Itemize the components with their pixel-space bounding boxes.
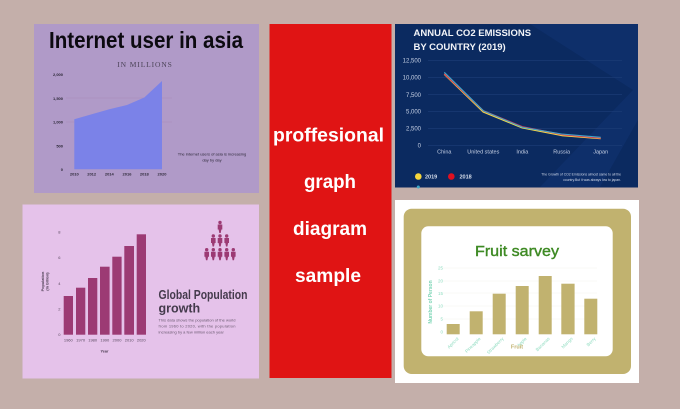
x axis labels (446, 336, 597, 355)
panel: red center title: sample (295, 265, 361, 287)
axis title: fruit: Fruit (511, 344, 523, 350)
bar chart (447, 276, 597, 334)
x axis labels: 2010 (125, 338, 134, 342)
x axis labels: China (437, 150, 452, 156)
y axis labels: 2,500 (406, 126, 422, 132)
y axis labels: 5,000 (406, 110, 422, 116)
y axis labels: 6 (58, 255, 61, 260)
heading: annual CO2 emissions: ANNUAL CO2 EMISSIONS (414, 28, 531, 39)
y axis labels: 4 (58, 281, 61, 286)
x axis labels: Russia (553, 150, 571, 156)
x axis labels: 1980 (88, 338, 98, 342)
y axis labels: 0 (61, 167, 64, 172)
y axis labels: 0 (58, 332, 61, 337)
line chart (444, 72, 601, 138)
description text: This data shows the population of the world (158, 318, 236, 322)
y axis labels: 10 (438, 304, 443, 308)
x axis labels: Berry (586, 336, 597, 347)
axis title: year: Year (100, 350, 109, 354)
panel: red center title: proffesional (273, 124, 384, 146)
y axis labels (438, 266, 443, 334)
panel: fruit survey (395, 200, 639, 383)
note text: country.But it was always low to japan. (563, 178, 621, 182)
x axis labels (64, 338, 147, 342)
legend (415, 173, 472, 188)
axis title: population: (in billion) (46, 272, 50, 291)
x axis labels: Apricot (446, 336, 460, 350)
panel: internet users in Asia (34, 24, 259, 193)
panel: global population growth (22, 204, 259, 378)
panel: red center title: diagram (293, 218, 367, 240)
x axis labels: Strawberry (486, 336, 505, 355)
y axis labels: 25 (438, 266, 443, 270)
x axis labels: 1970 (76, 338, 86, 342)
x axis labels: United states (467, 150, 500, 156)
heading: global population growth: Global Population (158, 288, 248, 302)
x axis labels: Japan (593, 150, 608, 156)
heading: annual CO2 emissions: BY COUNTRY (2019) (414, 42, 506, 53)
note text: The internet users of asia is increasing (178, 152, 246, 156)
subtitle: in millions: IN MILLIONS (117, 60, 173, 69)
note text: The Growth of CO2 Emissions almost same to all the (541, 172, 621, 176)
y axis labels: 500 (56, 144, 64, 148)
x axis labels: 2020 (137, 338, 147, 342)
panel: red center title: graph (304, 171, 356, 193)
y axis labels: 0 (440, 330, 443, 334)
y axis labels: 0 (418, 144, 422, 150)
y axis labels: 8 (58, 230, 61, 234)
x axis labels: 1990 (100, 338, 110, 342)
y axis labels: 1,000 (53, 120, 64, 124)
legend: 2018 (460, 174, 472, 180)
heading: global population growth: growth (158, 302, 200, 316)
axis title: number of person: Number of Person (428, 280, 434, 324)
x axis labels: 2010 (70, 172, 80, 176)
x axis labels: 2020 (158, 172, 167, 176)
x axis labels: 2016 (123, 172, 132, 176)
axis title: population: Population (41, 271, 45, 291)
y axis labels (53, 72, 64, 172)
x axis labels: Pineapple (464, 336, 482, 354)
x axis labels: 2000 (113, 338, 122, 342)
panel: CO2 emissions (395, 24, 638, 188)
x axis labels: 1960 (64, 338, 74, 342)
heading: fruit sarvey: Fruit sarvey (475, 243, 560, 260)
x axis labels (437, 150, 608, 156)
y axis labels: 5 (440, 316, 443, 322)
x axis labels: 2014 (105, 172, 115, 176)
x axis labels: 2018 (140, 172, 150, 176)
y axis labels: 10,000 (403, 76, 422, 82)
bar chart (64, 234, 146, 335)
panel: red center title (270, 24, 392, 378)
x axis labels: India (516, 150, 529, 156)
icon: people pyramid (204, 221, 236, 260)
y axis labels: 7,500 (406, 93, 422, 99)
y axis labels (58, 230, 61, 337)
y axis labels: 15 (438, 291, 443, 296)
y axis labels (403, 58, 422, 150)
note text: day by day (202, 158, 222, 162)
y axis labels: 20 (438, 278, 443, 284)
x axis labels: Bananas (535, 336, 551, 352)
x axis labels (70, 172, 167, 176)
y axis labels: 12,500 (403, 58, 422, 64)
description text: increasing by a few million each year (158, 330, 225, 334)
area chart (74, 81, 162, 169)
description text: from 1960 to 2020, with the population (158, 324, 236, 328)
x axis labels: 2012 (87, 172, 97, 176)
x axis labels: Apple (516, 336, 528, 348)
y axis labels: 2 (58, 306, 61, 312)
x axis labels: Mango (560, 336, 574, 349)
y axis labels: 1,500 (53, 96, 64, 101)
heading: Internet user in asia: Internet user in asia (49, 27, 243, 53)
legend: 2019 (425, 174, 437, 180)
y axis labels: 2,000 (53, 72, 64, 77)
